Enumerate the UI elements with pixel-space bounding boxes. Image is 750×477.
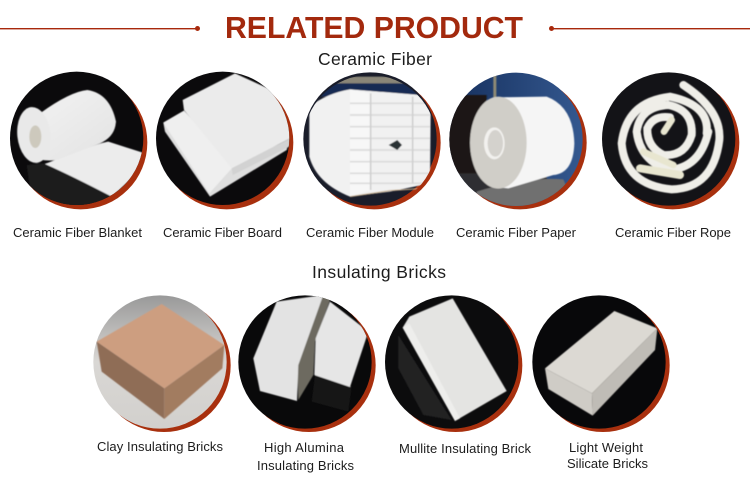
label [257,440,354,473]
product: Ceramic Fiber Rope [602,72,739,240]
label: Ceramic Fiber Rope [615,225,731,240]
label [567,440,648,471]
product: Clay Insulating Bricks [93,295,231,454]
product: High Alumina Insulating Bricks [238,295,376,473]
product: Mullite Insulating Brick [385,295,532,456]
label: High Alumina [264,440,345,455]
heading: Ceramic Fiber: Ceramic Fiber [318,49,432,69]
label: Light Weight [569,440,643,455]
label: Ceramic Fiber Board [163,225,282,240]
label: Ceramic Fiber Blanket [13,225,142,240]
header rule: right [549,26,750,31]
title: RELATED PRODUCT [225,10,523,45]
product: Light Weight Silicate Bricks [532,295,670,471]
product: Ceramic Fiber Module [300,72,441,240]
heading: Insulating Bricks: Insulating Bricks [312,262,446,282]
label: Ceramic Fiber Paper [456,225,577,240]
label: Mullite Insulating Brick [399,441,532,456]
header rule: left [0,26,200,31]
label: Clay Insulating Bricks [97,439,224,454]
product: Ceramic Fiber Blanket [10,72,147,240]
product: Ceramic Fiber Board [156,72,293,240]
label: Ceramic Fiber Module [306,225,434,240]
label: Silicate Bricks [567,456,648,471]
label: Insulating Bricks [257,458,354,473]
product: Ceramic Fiber Paper [447,73,587,240]
